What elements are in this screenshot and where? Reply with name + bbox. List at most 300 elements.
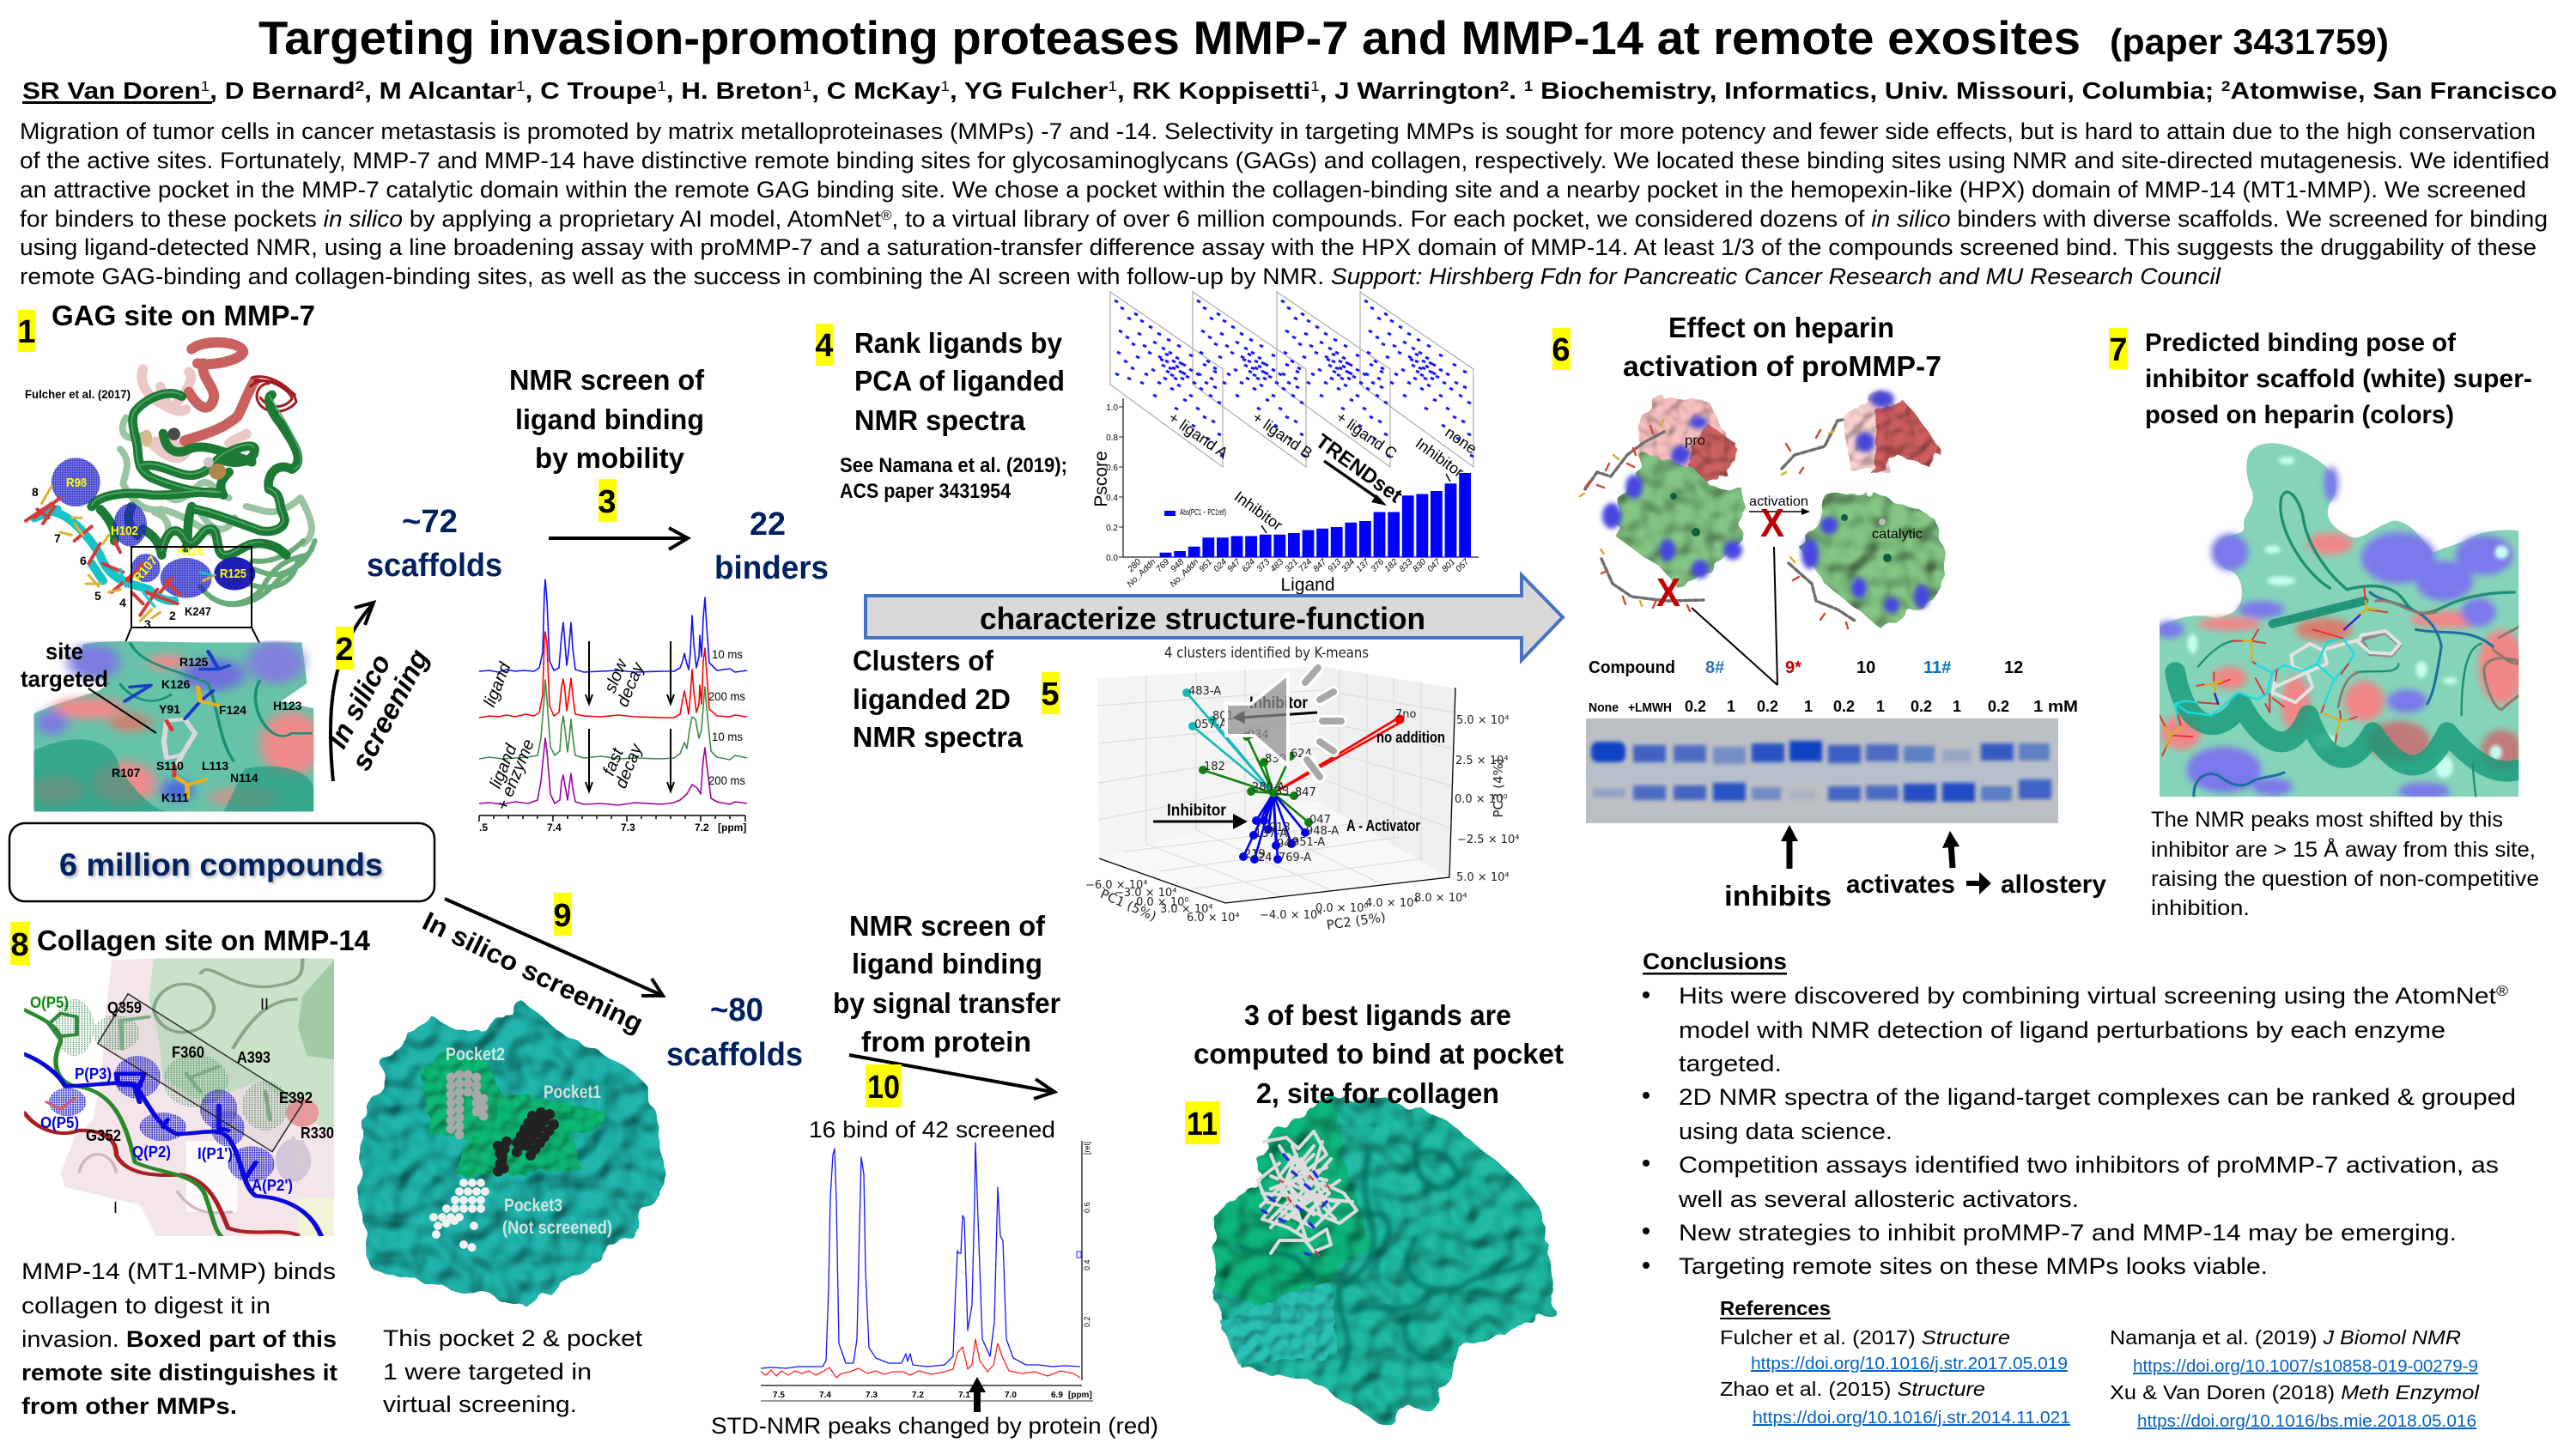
authors and affiliations: SR Van Doren 1, D Bernard 2, M Alcantar 1, C Troupe 1, H. Breton 1, C McKay 1, YG Fulcher 1, RK Koppisetti 1, J Warrington 2. 1 Biochemistry, Informatics, Univ. Missouri, Columbia; 2Atomwise, San Francisco [22, 77, 2557, 104]
STD-NMR spectrum: 6.9 [1051, 1391, 1063, 1400]
abstract text block: Migration of tumor cells in cancer metastasis is promoted by matrix metalloproteinases (MMPs) -7 and -14. Selectivity in targeting MMPs is sought for more potency and fewer side effects, but is hard to attain due to the high conservation [20, 118, 2536, 144]
gel lane labels: 0.2 [1911, 698, 1932, 715]
NMR line-broadening spectra [479, 579, 747, 834]
NMR line-broadening spectra: ligand [480, 659, 515, 710]
heading 3: NMR screen by mobility: by mobility [535, 442, 685, 474]
pro domain and catalytic domain after activation: catalytic [1872, 527, 1923, 542]
bar chart: Pscore by ligand: 951 [1198, 557, 1214, 574]
heading 5 [853, 645, 1024, 753]
arrow and label 2: in silico screening [321, 603, 434, 781]
3D PCA plot: Inhibitor [1167, 802, 1227, 820]
NMR line-broadening spectra: decay [611, 741, 647, 791]
heading 5: NMR spectra [853, 721, 1024, 753]
arrow 3 [549, 528, 688, 549]
references: Fulcher et al. (2017) Structure [1720, 1326, 2010, 1349]
gel lane labels: 9* [1785, 658, 1801, 677]
bar chart: Pscore by ligand: 0.4 [1106, 494, 1118, 503]
references: Namanja et al. (2019) J Biomol NMR [2110, 1326, 2461, 1349]
gel lane labels: 1 mM [2033, 698, 2078, 715]
proMMP-7 complex: pro domain and catalytic domain [1602, 395, 1743, 587]
3D PCA plot: 0.0 × 10⁰ [1315, 902, 1369, 915]
3D PCA plot: −4.0 × 10⁴ [1260, 909, 1321, 922]
STD-NMR spectrum: 0.4 [1083, 1259, 1091, 1270]
NMR line-broadening spectra: ligand [486, 741, 521, 791]
3D PCA plot: 847 [1295, 786, 1316, 799]
bar chart: Pscore by ligand: 321 [1284, 557, 1300, 574]
badge 11: 11 [1187, 1106, 1218, 1143]
NMR line-broadening spectra: slow [601, 656, 632, 695]
structure labels: Q(P2) [132, 1143, 171, 1161]
bar chart: Pscore by ligand: 057 [1455, 557, 1471, 574]
badge 8: 8 [10, 927, 29, 963]
pro domain and catalytic domain after activation [1799, 391, 1947, 628]
text: MMP-14 description: MMP-14 (MT1-MMP) binds [21, 1258, 336, 1284]
bar chart: Pscore by ligand: 373 [1255, 557, 1272, 574]
3D PCA plot: PC1 (5%) [1098, 886, 1158, 925]
3D PCA plot: 33 [1275, 785, 1290, 798]
caption: NMR peaks non-competitive [2151, 808, 2539, 920]
site labels: Y91 [159, 702, 180, 716]
3D PCA plot: 219 [1244, 848, 1266, 861]
structure labels: Q359 [107, 999, 142, 1016]
STD-NMR spectrum [761, 1141, 1093, 1401]
conclusions bullet list: Competition assays identified two inhibitors of proMMP-7 activation, as [1679, 1152, 2499, 1178]
bar chart: Pscore by ligand: 334 [1340, 557, 1357, 574]
heading 7: Predicted binding pose of [2145, 329, 2457, 357]
stacked 2D NMR planes: + ligand A [1165, 409, 1231, 462]
pocket 3 spheres [434, 1183, 488, 1249]
3D PCA plot: PC3 (4%) [1491, 758, 1506, 818]
residue labels on ribbon: 4 [119, 596, 126, 609]
NMR line-broadening spectra: 7.3 [621, 822, 635, 834]
caption: NMR peaks non-competitive: raising the question of non-competitive [2151, 867, 2539, 891]
STD-NMR spectrum: [ppm] [1068, 1391, 1092, 1400]
box: 6 million compounds [9, 823, 434, 901]
3D PCA plot: 4 clusters identified by K-means [1164, 645, 1369, 662]
conclusions bullet list: Hits were discovered by combining virtual screening using the AtomNet ® [1679, 982, 2509, 1009]
3D PCA plot: 5.0 × 10⁴ [1456, 714, 1510, 727]
gel lane labels: None [1589, 700, 1619, 715]
large arrow: characterize structure-function [866, 575, 1563, 660]
text: MMP-14 description [21, 1258, 337, 1419]
STD-NMR spectrum: 7.4 [819, 1391, 831, 1400]
bar chart: Pscore by ligand: 724 [1297, 557, 1314, 574]
caption: STD-NMR: STD-NMR peaks changed by protein (red) [711, 1413, 1158, 1439]
3D PCA plot: 182 [1204, 761, 1225, 773]
3D PCA plot: 4.0 × 10⁴ [1365, 897, 1419, 910]
STD-NMR spectrum: 0.6 [1083, 1202, 1091, 1213]
label: ~80 scaffolds: scaffolds [666, 1037, 803, 1073]
residue labels on ribbon [32, 476, 246, 631]
caption: NMR peaks non-competitive: The NMR peaks most shifted by this [2151, 808, 2503, 832]
bar chart: Pscore by ligand: 624 [1241, 557, 1257, 574]
bar chart: Pscore by ligand: 280 [1126, 557, 1143, 575]
site labels: K126 [161, 677, 191, 691]
arrow and label 9: in silico screening: In silico screening [418, 906, 648, 1039]
conclusions bullet list: targeted. [1679, 1051, 1782, 1076]
structure labels: O(P5) [30, 994, 69, 1011]
3D PCA plot: A - Activator [1346, 817, 1420, 834]
callout: site targeted: targeted [21, 666, 108, 692]
large arrow: characterize structure-function: characterize structure-function [980, 601, 1425, 636]
label: 22 binders: 22 [750, 506, 786, 543]
arrow 10 with badge [849, 1055, 1054, 1107]
site labels: F124 [219, 703, 246, 717]
bar chart: Pscore by ligand: 1.0 [1106, 403, 1118, 413]
citation: Namana: ACS paper 3431954 [840, 480, 1012, 503]
abstract text block: for binders to these pockets in silico by applying a proprietary AI model, AtomNet ®, to a virtual library of over 6 million compounds. For each pocket, we considered dozens of in silico binders with diverse scaffolds. We screened for binding [20, 206, 2548, 232]
structure labels: E392 [279, 1089, 313, 1106]
site labels: K111 [161, 791, 189, 804]
STD-NMR spectrum: 7.2 [912, 1391, 924, 1400]
NMR line-broadening spectra: fast [599, 744, 628, 779]
3D PCA plot: 280-A [1252, 781, 1285, 794]
gel lane labels: 1 [1804, 698, 1813, 715]
3D PCA plot: 047 [1309, 814, 1331, 827]
label: ~80 scaffolds [666, 992, 803, 1073]
3D PCA plot: no addition [1376, 729, 1445, 746]
3D PCA plot: 137-A [1255, 828, 1287, 840]
caption: pockets targeted: This pocket 2 & pocket [383, 1325, 643, 1351]
heading 3: NMR screen by mobility [509, 364, 705, 522]
heading 11: computed to bind at pocket [1194, 1038, 1564, 1070]
gel outcome labels: inhibits [1724, 880, 1832, 912]
structure labels: F360 [172, 1044, 204, 1061]
arrow: activates [1942, 831, 1959, 868]
bar chart: Pscore by ligand: 024 [1212, 557, 1229, 574]
STD-NMR spectrum: 7.0 [1005, 1391, 1017, 1400]
arrow and label 2: in silico screening: 2 [335, 632, 354, 668]
heading 7: inhibitor scaffold (white) super- [2145, 365, 2532, 393]
residue labels on ribbon: 3 [144, 617, 151, 631]
residue labels on ribbon: 6 [80, 554, 87, 567]
pocket labels [446, 1045, 612, 1238]
references: https://doi.org/10.1007/s10858-019-00279-9 [2133, 1357, 2478, 1376]
NMR line-broadening spectra: .5 [479, 822, 488, 834]
3D PCA plot: 948-A [1306, 825, 1339, 838]
heparin sticks on complex [1580, 414, 1868, 628]
NMR line-broadening spectra: 10 ms [712, 647, 743, 661]
badge 1: 1 [17, 314, 36, 350]
conclusions bullet list: model with NMR detection of ligand perturbations by each enzyme [1679, 1017, 2445, 1043]
bar chart: Pscore by ligand: Abs(PC1 − PC1ref) [1180, 508, 1226, 518]
gel lane labels: 1 [1876, 698, 1885, 715]
surface close-up of targeted site [31, 640, 323, 811]
residue labels on ribbon: 2 [169, 609, 176, 622]
icon: speaker overlay [1226, 668, 1341, 777]
heading 11 [1194, 999, 1564, 1109]
NMR line-broadening spectra: 200 ms [708, 773, 745, 787]
protein surface [1213, 1095, 1552, 1422]
arrow and label 2: in silico screening: In silico [321, 649, 397, 753]
panel 8: collagen site on MMP-14 [10, 922, 371, 1419]
heading 10: NMR screen by signal transfer: from protein [861, 1026, 1031, 1058]
panel 7: predicted binding pose [2109, 328, 2539, 920]
NMR line-broadening spectra: 7.2 [695, 822, 709, 834]
residue labels on ribbon: K247 [185, 604, 211, 618]
bar chart: Pscore by ligand [1091, 398, 1479, 595]
structure of collagen binding site [24, 958, 334, 1236]
3D PCA plot: Inhibitor [1249, 694, 1309, 712]
site labels: L113 [202, 759, 228, 773]
citation: Fulcher et al. (2017) [25, 387, 131, 401]
connector lines [1692, 547, 1777, 685]
label: ~72 scaffolds [367, 504, 502, 584]
citation: Namana [840, 454, 1067, 503]
heading 5: Clusters of [853, 645, 994, 676]
3D PCA plot: −3.0 × 10⁴ [1115, 887, 1176, 900]
3D PCA plot: −2.5 × 10⁴ [1457, 834, 1519, 846]
stacked 2D NMR planes [1110, 292, 1480, 467]
NMR line-broadening spectra: [ppm] [718, 822, 746, 834]
abstract text block: of the active sites. Fortunately, MMP-7 and MMP-14 have distinctive remote binding sites for glycosaminoglycans (GAGs) and collagen, respectively. We located these binding sites using NMR and site-directed mutagenesis. We identified [20, 148, 2549, 173]
gel outcome labels: activates [1846, 870, 1955, 899]
NMR line-broadening spectra: 7.4 [547, 822, 562, 834]
ligand ensemble [1258, 1131, 1357, 1255]
STD-NMR spectrum: 0.2 [1083, 1316, 1091, 1327]
references: Zhao et al. (2015) Structure [1720, 1378, 1985, 1400]
conclusions bullet list: New strategies to inhibit proMMP-7 and MMP-14 may be emerging. [1679, 1220, 2457, 1246]
label: ~72 scaffolds: ~72 [402, 504, 458, 540]
3D PCA plot: 7no [1395, 708, 1417, 721]
3D PCA plot: 624 [1291, 748, 1312, 761]
structure labels: I(P1') [197, 1145, 233, 1162]
text: MMP-14 description: remote site distinguishes it [21, 1360, 337, 1385]
callout: site targeted: site [46, 639, 83, 664]
STD-NMR spectrum: [rel] [1083, 1142, 1091, 1155]
gel lane labels: 12 [2004, 658, 2023, 677]
heading 7: posed on heparin (colors) [2145, 401, 2454, 429]
bar chart: Pscore by ligand: 0.0 [1106, 554, 1118, 563]
gel lane labels: 1 [1727, 698, 1735, 715]
conclusions bullet list [1643, 982, 2516, 1279]
3D PCA plot: 3.0 × 10⁴ [1160, 903, 1213, 916]
3D PCA plot: 24 [1258, 852, 1273, 864]
caption: pockets targeted [383, 1325, 643, 1417]
heading 5: liganded 2D [853, 683, 1011, 715]
residue labels on ribbon: R98 [66, 476, 87, 490]
gel lane labels: 1 [1953, 698, 1961, 715]
3D PCA plot: 483-A [1188, 685, 1221, 698]
site labels: R125 [179, 655, 209, 669]
caption: pockets targeted: 1 were targeted in [383, 1359, 592, 1385]
bar chart: Pscore by ligand: 0.6 [1106, 464, 1118, 473]
bar chart: Pscore by ligand: 830 [1412, 557, 1428, 574]
residue labels on ribbon: 5 [94, 589, 101, 603]
label: 22 binders [714, 506, 829, 586]
arrow and label 9: in silico screening: 9 [553, 898, 572, 934]
structure labels: R330 [301, 1125, 334, 1142]
label: ~80 scaffolds: ~80 [710, 992, 763, 1028]
arrow 10 with badge: 10 [867, 1070, 900, 1106]
3D PCA plot [1085, 645, 1519, 933]
pocket labels: Pocket3 [504, 1196, 562, 1216]
heading 4: NMR spectra [854, 404, 1026, 436]
panel 6: effect on heparin activation [1552, 312, 2106, 912]
heading: collagen site: Collagen site on MMP-14 [37, 925, 371, 956]
NMR line-broadening spectra: 10 ms [712, 730, 743, 743]
conclusions bullet list: using data science. [1679, 1119, 1893, 1144]
heading 4: PCA of liganded [854, 365, 1065, 397]
heading 4 [854, 327, 1065, 436]
references: https://doi.org/10.1016/bs.mie.2018.05.016 [2137, 1412, 2476, 1431]
structure labels: O(P5) [40, 1114, 79, 1131]
heading 10: NMR screen by signal transfer: NMR screen of [849, 910, 1046, 942]
gel lane labels: 0.2 [1833, 698, 1855, 715]
panel 1: GAG site on MMP-7 [17, 300, 323, 811]
3D PCA plot: 2.5 × 10⁴ [1455, 755, 1509, 767]
references: References [1720, 1297, 1831, 1319]
3D PCA plot: 913 [1269, 822, 1291, 834]
text: MMP-14 description: invasion. Boxed part of this [21, 1326, 337, 1352]
gel lane labels [1589, 658, 2078, 715]
badge 6: 6 [1552, 332, 1571, 368]
arrow pointing at STD peak [969, 1377, 986, 1412]
heading 3: NMR screen by mobility: 3 [598, 484, 617, 520]
site labels: H123 [273, 699, 302, 712]
structure labels: II [260, 996, 269, 1013]
arrow and label 2: in silico screening: screening [344, 644, 434, 775]
stacked 2D NMR planes: + ligand B [1249, 409, 1315, 462]
structure labels: I [113, 1199, 118, 1216]
heading 10: NMR screen by signal transfer [833, 910, 1060, 1058]
activation arrow blocked by X [1749, 494, 1810, 545]
title: (paper 3431759) [2110, 21, 2389, 62]
bar chart: Pscore by ligand: 0.2 [1106, 524, 1118, 533]
activation arrow blocked by X: activation [1749, 494, 1808, 509]
bar chart: Pscore by ligand: TRENDset [1311, 430, 1406, 507]
site labels: S110 [156, 759, 184, 773]
bar chart: Pscore by ligand: Inhibitor [1231, 488, 1285, 534]
panel 9: hemopexin pocket surface [358, 1001, 665, 1417]
3D PCA plot: 8.0 × 10⁴ [1414, 892, 1467, 905]
residue labels on ribbon: R107 [131, 554, 161, 585]
panel 4: rank ligands by PCA [815, 292, 1480, 595]
panel 11: best ligands bound to pocket 2 [1185, 999, 1564, 1422]
structure labels: P(P3) [75, 1065, 112, 1082]
gel image [1586, 718, 2058, 823]
residue labels on ribbon: K126 [178, 544, 204, 559]
3D PCA plot: 951-A [1292, 836, 1325, 849]
3D PCA plot: 0.0 × 10⁰ [1455, 793, 1508, 806]
abstract text block: using ligand-detected NMR, using a line broadening assay with proMMP-7 and a saturation-transfer difference assay with the HPX domain of MMP-14. At least 1/3 of the compounds screened bind. This suggests the druggability of these [20, 234, 2537, 260]
heading 11: 2, site for collagen [1256, 1077, 1499, 1109]
bar chart: Pscore by ligand: Inhibitor [1413, 434, 1467, 481]
proMMP-7 complex: pro domain and catalytic domain: pro [1685, 433, 1705, 448]
teal surface [358, 1001, 665, 1306]
bar chart: Pscore by ligand: No_Addn [1126, 557, 1157, 590]
caption: NMR peaks non-competitive: inhibitor are > 15 Å away from this site, [2151, 836, 2536, 862]
surface with bound inhibitor and heparin [2155, 443, 2524, 800]
badge 7: 7 [2109, 332, 2128, 368]
heading: GAG site: GAG site on MMP-7 [52, 300, 315, 331]
bar chart: Pscore by ligand: 047 [1426, 557, 1443, 574]
ribbon structure of MMP-7 [26, 343, 315, 621]
arrow: inhibits [1781, 825, 1798, 869]
abstract text block: remote GAG-binding and collagen-binding sites, as well as the success in combining the AI screen with follow-up by NMR. Support: Hirshberg Fdn for Pancreatic Cancer Research and MU Research Council [20, 264, 2221, 289]
heading 6 [1623, 312, 1941, 382]
bar chart: Pscore by ligand: Ligand [1280, 575, 1335, 595]
references: Xu & Van Doren (2018) Meth Enzymol [2110, 1381, 2480, 1404]
gel outcome labels [1724, 870, 2106, 912]
caption: pockets targeted: virtual screening. [383, 1391, 577, 1417]
conclusions bullet list: Targeting remote sites on these MMPs looks viable. [1679, 1253, 2268, 1279]
structure labels [30, 994, 334, 1216]
3D PCA plot: 769-A [1279, 852, 1311, 864]
3D PCA plot: −6.0 × 10⁴ [1085, 879, 1147, 892]
bar chart: Pscore by ligand: 769 [1155, 557, 1171, 574]
heading 6: Effect on heparin [1668, 312, 1894, 343]
panel 5: clusters of liganded spectra [853, 645, 1519, 933]
bar chart: Pscore by ligand: 847 [1312, 557, 1328, 574]
heading 3: NMR screen by mobility: NMR screen of [509, 364, 705, 396]
caption: NMR peaks non-competitive: inhibition. [2151, 896, 2250, 920]
NMR line-broadening spectra: 200 ms [708, 689, 745, 703]
structure labels: A(P2') [252, 1177, 293, 1194]
residue labels on ribbon: 8 [32, 485, 39, 499]
NMR line-broadening spectra: decay [613, 659, 648, 710]
bar chart: Pscore by ligand: 137 [1355, 557, 1371, 574]
badge 5: 5 [1041, 676, 1060, 712]
pocket 1 spheres [498, 1113, 554, 1173]
bar chart: Pscore by ligand: 913 [1327, 557, 1343, 574]
box: 6 million compounds: 6 million compounds [59, 847, 383, 882]
gel lane labels: 11# [1923, 658, 1951, 677]
3D PCA plot: PC2 (5%) [1326, 909, 1387, 933]
bar chart: Pscore by ligand: 948 [1170, 557, 1186, 574]
abstract text block: an attractive pocket in the MMP-7 catalytic domain within the remote GAG binding site. We chose a pocket within the collagen-binding site and a nearby pocket in the hemopexin-like (HPX) domain of MMP-14 (MT1-MMP). We screened [20, 177, 2526, 203]
structure labels: G352 [86, 1127, 121, 1144]
residue labels on ribbon: R125 [220, 567, 246, 581]
bar chart: Pscore by ligand: No_Addn [1169, 557, 1200, 590]
citation: Namana: See Namana et al. (2019); [840, 454, 1067, 477]
label: 22 binders: binders [714, 550, 829, 586]
text: MMP-14 description: collagen to digest it in [21, 1293, 270, 1319]
3D PCA plot: 034 [1248, 729, 1269, 742]
references: https://doi.org/10.1016/j.str.2014.11.021 [1753, 1409, 2070, 1428]
heading 3: NMR screen by mobility: ligand binding [515, 403, 704, 435]
NMR line-broadening spectra: + enzyme [493, 737, 538, 813]
heading 7 [2145, 329, 2532, 429]
gel lane labels: Compound [1589, 658, 1675, 677]
gel lane labels: +LMWH [1628, 700, 1672, 715]
heading 6: activation of proMMP-7 [1623, 350, 1941, 382]
activation arrow blocked by X: X [1760, 500, 1784, 545]
text: 16 bind of 42: 16 bind of 42 screened [809, 1117, 1055, 1143]
3D PCA plot: 057-A [1194, 718, 1227, 731]
bar chart: Pscore by ligand: 947 [1226, 557, 1242, 574]
bar chart: Pscore by ligand: 182 [1383, 557, 1400, 574]
text: MMP-14 description: from other MMPs. [21, 1393, 237, 1419]
site labels: R107 [112, 766, 141, 779]
residue labels on ribbon: 7 [54, 531, 61, 545]
site labels: N114 [230, 771, 258, 785]
STD-NMR spectrum: 7.5 [773, 1391, 785, 1400]
3D PCA plot: 801 [1212, 710, 1234, 723]
heading 4: Rank ligands by [854, 327, 1063, 359]
gel lane labels: 8# [1705, 658, 1724, 677]
badge 4: 4 [815, 328, 834, 364]
pocket labels: Pocket1 [544, 1082, 601, 1102]
conclusions bullet list: 2D NMR spectra of the ligand-target complexes can be ranked & grouped [1679, 1084, 2516, 1110]
callout: site targeted [21, 639, 156, 733]
structure labels: A393 [237, 1049, 270, 1066]
gel lane labels: 0.2 [1757, 698, 1778, 715]
conclusions bullet list: well as several allosteric activators. [1678, 1186, 2079, 1212]
pocket labels: Pocket2 [446, 1045, 505, 1064]
pocket 2 spheres [451, 1075, 483, 1137]
bar chart: Pscore by ligand: 483 [1269, 557, 1285, 574]
